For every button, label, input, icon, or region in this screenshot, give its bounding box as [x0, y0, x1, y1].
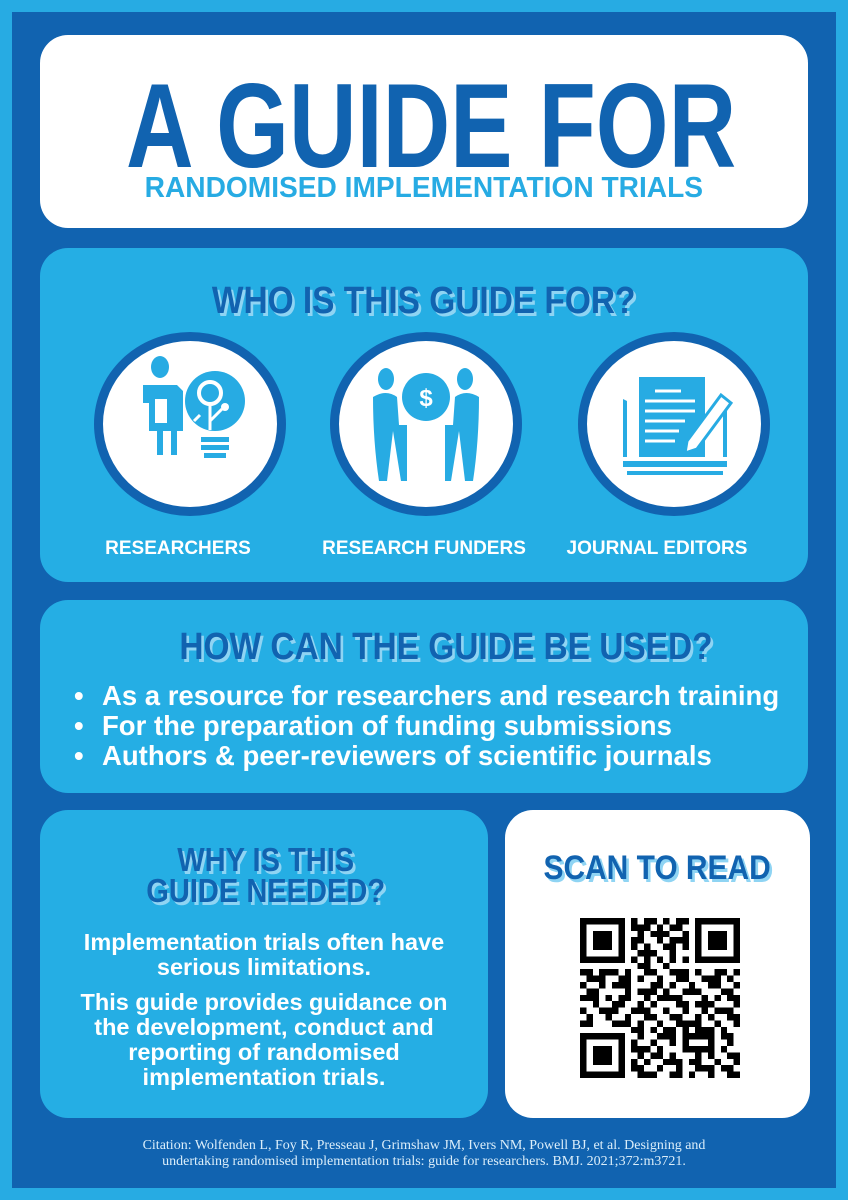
panel: why is this guide needed — [40, 810, 488, 1118]
label: research funders: RESEARCH FUNDERS — [322, 538, 526, 559]
label: journal editors: JOURNAL EDITORS — [567, 538, 747, 559]
title: A GUIDE FOR — [126, 59, 736, 193]
title box — [40, 35, 808, 228]
bullet list: For the preparation of funding submissions — [102, 710, 672, 741]
text block — [80, 989, 447, 1090]
citation: Citation: Wolfenden L, Foy R, Presseau J, Grimshaw JM, Ivers NM, Powell BJ, et al. Designing and — [143, 1138, 705, 1153]
panel: who is this guide for — [40, 248, 808, 582]
citation: undertaking randomised implementation trials: guide for researchers. BMJ. 2021;372:m3721. — [162, 1154, 686, 1169]
text block: This guide provides guidance on — [81, 989, 447, 1015]
icon: researcher — [94, 332, 286, 516]
bullet list: • — [74, 680, 84, 711]
icon: research funders: $ — [419, 385, 433, 412]
qr code — [580, 918, 740, 1078]
text block: reporting of randomised — [128, 1039, 400, 1065]
bullet list: As a resource for researchers and research training — [102, 680, 779, 711]
heading: HOW CAN THE GUIDE BE USED? — [179, 626, 713, 668]
icon: journal editors — [578, 332, 770, 516]
icon: research funders — [330, 332, 522, 516]
bullet list — [74, 680, 779, 771]
label: researchers: RESEARCHERS — [105, 538, 251, 559]
bullet list: • — [74, 710, 84, 741]
panel: how can the guide be used — [40, 600, 808, 793]
text block: Implementation trials often have — [84, 929, 444, 955]
subtitle: RANDOMISED IMPLEMENTATION TRIALS — [145, 172, 703, 204]
citation — [143, 1138, 706, 1169]
text block: implementation trials. — [143, 1064, 385, 1090]
heading: GUIDE NEEDED? — [147, 872, 385, 909]
heading: WHY IS THIS — [178, 841, 354, 878]
bullet list: Authors & peer-reviewers of scientific journals — [102, 740, 712, 771]
bullet list: • — [74, 740, 84, 771]
panel: scan to read — [505, 810, 810, 1118]
text block: serious limitations. — [157, 954, 371, 980]
text block — [84, 929, 444, 980]
heading: SCAN TO READ — [544, 849, 771, 887]
heading — [147, 841, 386, 909]
text block: the development, conduct and — [94, 1014, 434, 1040]
heading: WHO IS THIS GUIDE FOR? — [212, 280, 636, 322]
